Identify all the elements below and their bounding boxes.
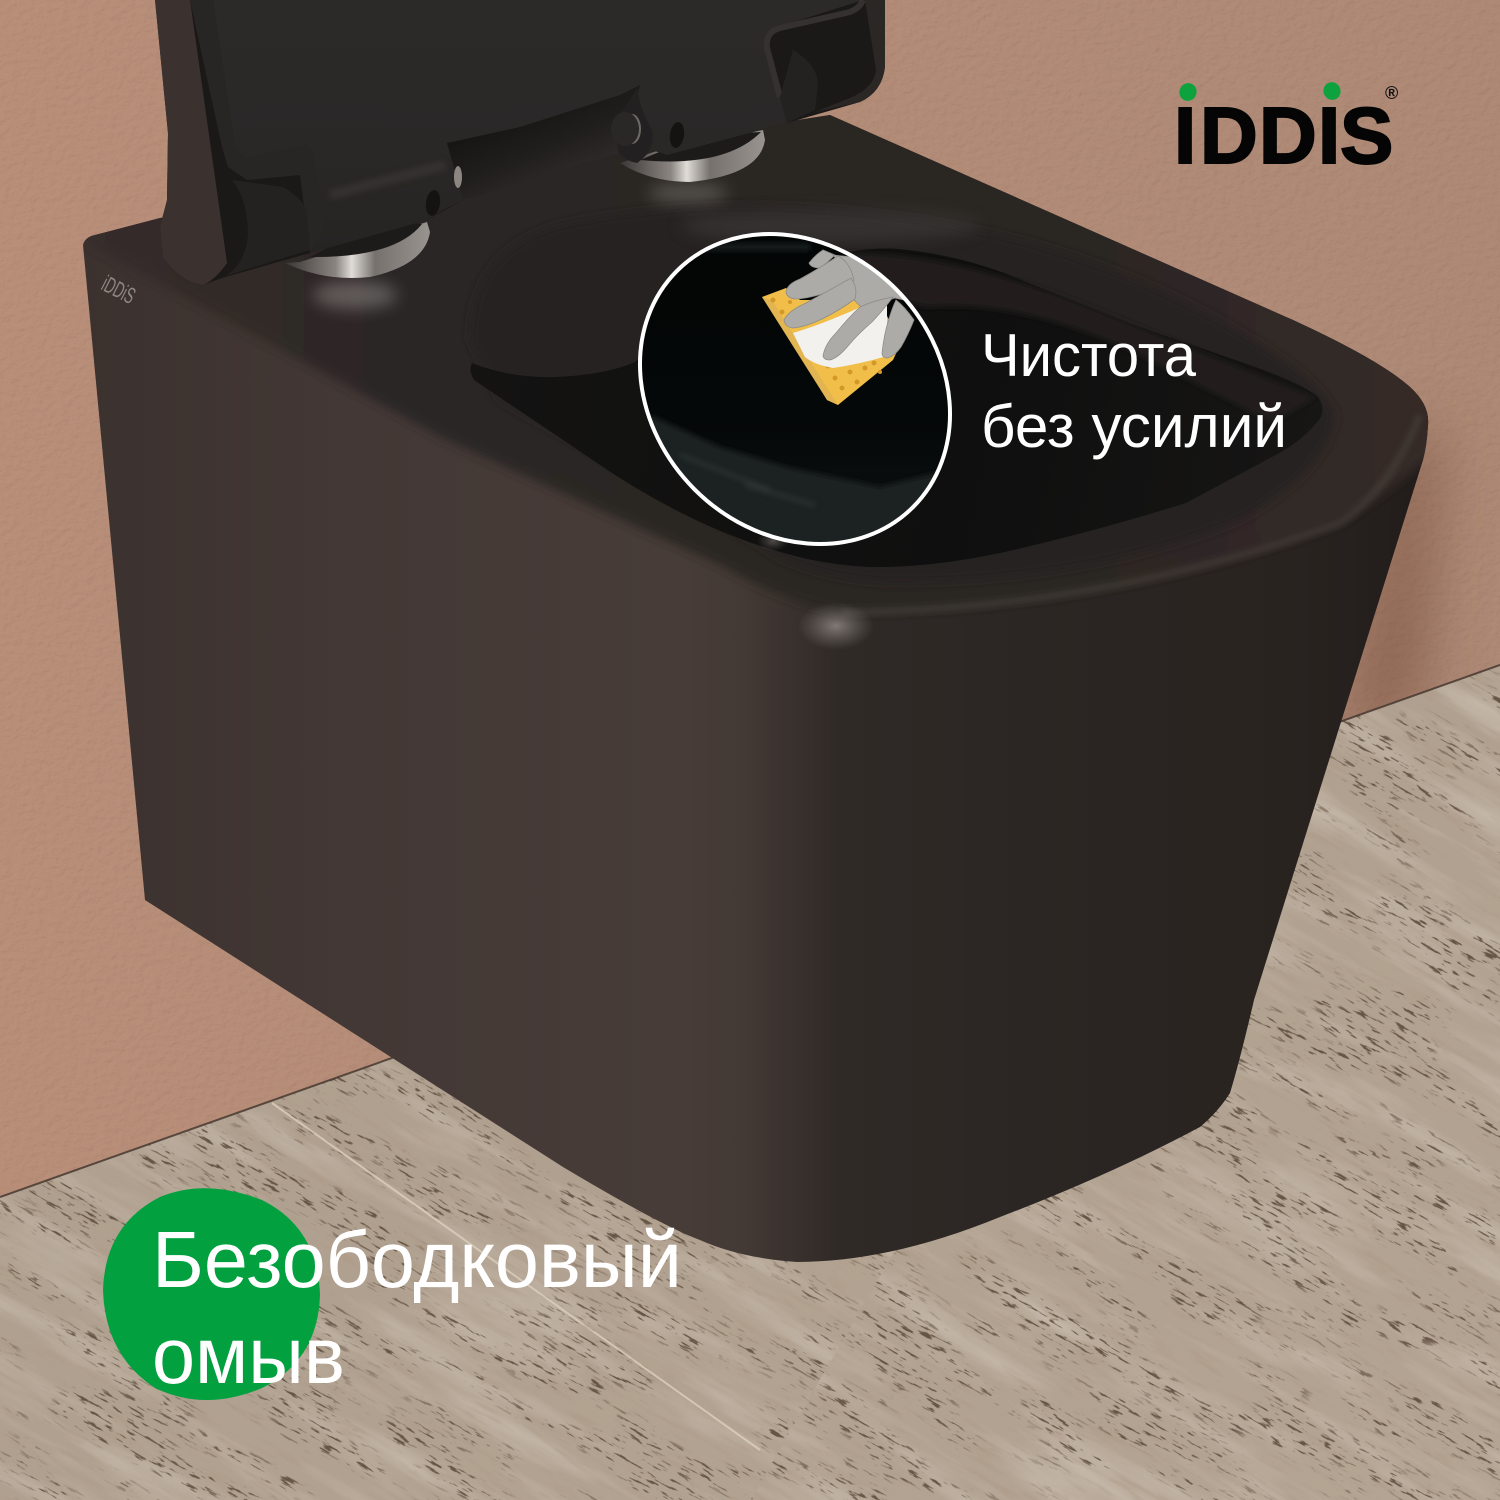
hinge axle — [447, 85, 640, 200]
headline badge — [103, 1188, 682, 1400]
lens content — [642, 236, 948, 542]
lens outline — [577, 171, 1013, 607]
callout text — [981, 322, 1287, 460]
right frame ridge — [767, 0, 863, 97]
registered mark: ® — [1385, 83, 1398, 103]
hinge pin chrome — [454, 166, 462, 188]
callout text: Чистота — [981, 322, 1197, 389]
lid right edge strip — [815, 0, 885, 112]
front edge gloss highlight — [798, 602, 874, 650]
lid base shape — [155, 0, 885, 285]
seat recess around the bowl opening — [470, 206, 1335, 582]
green blob — [103, 1188, 320, 1400]
right hinge block — [780, 50, 818, 123]
hinge screw slots — [424, 121, 686, 217]
gloved hand — [784, 250, 925, 360]
left hinge sheen — [330, 165, 445, 195]
bowl top surface — [60, 90, 1460, 612]
headline text: Безободковый — [152, 1215, 682, 1304]
dark bowl opening — [470, 248, 1322, 567]
headline text: омыв — [152, 1311, 345, 1400]
brand mark on bowl side: iDDiS — [98, 270, 140, 309]
hinge pin — [611, 87, 653, 163]
inner bowl ledge — [842, 253, 1315, 423]
left hinge block — [225, 180, 310, 276]
chrome hinge discs — [285, 130, 765, 309]
logo green dots — [1176, 79, 1344, 104]
callout lens: cleaning close-up — [638, 232, 952, 546]
lid left edge strip — [155, 0, 227, 285]
left frame ridge — [190, 0, 325, 253]
soap foam — [793, 306, 887, 368]
raised seat lid — [155, 0, 885, 285]
travertine floor — [0, 665, 1500, 1500]
bowl body — [83, 115, 1428, 1262]
headline text — [152, 1215, 682, 1400]
left disc — [285, 220, 430, 309]
logo wordmark: IDDIS — [1174, 91, 1393, 180]
bowl rim glint — [757, 531, 789, 551]
right disc — [620, 130, 765, 203]
wall-hung toilet bowl — [60, 90, 1460, 1262]
callout text: без усилий — [981, 393, 1287, 460]
sponge — [762, 288, 900, 405]
IDDIS logo — [1174, 79, 1398, 180]
recess rim highlight — [680, 210, 980, 242]
lid inner panel — [213, 0, 863, 253]
